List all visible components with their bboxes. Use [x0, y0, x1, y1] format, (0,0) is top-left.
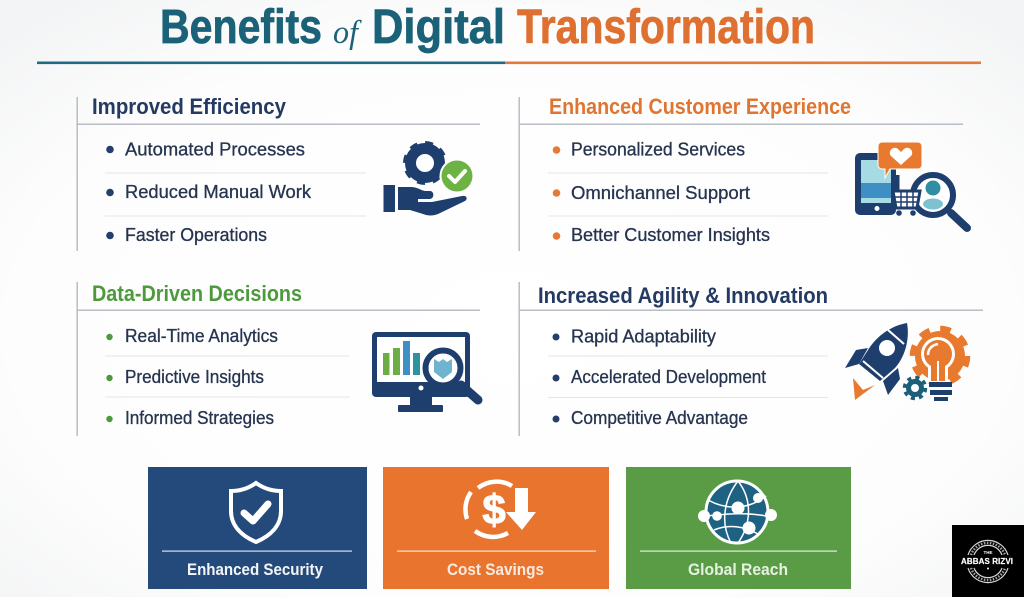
list item: rapid adaptability: Rapid Adaptability: [571, 326, 716, 346]
list item: personalized services: Personalized Services: [571, 140, 745, 160]
title: [160, 1, 815, 54]
label: enhanced security: Enhanced Security: [187, 560, 323, 579]
title: of: [333, 15, 362, 51]
label: cost savings: Cost Savings: [447, 560, 544, 579]
logo: the abbas rizvi: ABBAS RIZVI: [961, 557, 1013, 566]
heading: improved efficiency: Improved Efficiency: [92, 94, 287, 119]
label: global reach: Global Reach: [688, 560, 788, 579]
panel: enhanced customer experience: [518, 94, 963, 251]
icon: dollar with down arrow: [465, 482, 536, 537]
list item: predictive insights: Predictive Insights: [125, 367, 264, 387]
card: enhanced security: [148, 467, 367, 589]
title: Transformation: [517, 1, 815, 54]
icon: rocket and light bulb gear: [845, 323, 967, 401]
list item: faster operations: Faster Operations: [125, 225, 267, 245]
card: cost savings: [383, 467, 609, 589]
list item: real-time analytics: Real-Time Analytics: [125, 326, 278, 346]
list item: automated processes: Automated Processes: [125, 140, 305, 160]
icon: shield with check: [231, 483, 281, 542]
title: Benefits: [160, 1, 322, 54]
list item: better customer insights: Better Customer Insights: [571, 225, 770, 245]
list item: omnichannel support: Omnichannel Support: [571, 183, 750, 203]
icon: gear and hand with check: [384, 144, 474, 216]
card: global reach: [626, 467, 851, 589]
panel: improved efficiency: [76, 94, 480, 251]
icon: monitor chart with magnifier: [372, 332, 478, 412]
icon: tablet, cart and magnifier: [855, 142, 967, 228]
list item: competitive advantage: Competitive Advantage: [571, 408, 748, 428]
panel: data-driven decisions: [76, 281, 480, 436]
title: Digital: [372, 1, 505, 54]
logo: the abbas rizvi: [952, 525, 1024, 597]
title underline: [37, 62, 981, 64]
panel: increased agility and innovation: [518, 282, 983, 436]
list item: accelerated development: Accelerated Development: [571, 367, 766, 387]
heading: data-driven decisions: Data-Driven Decisions: [92, 281, 302, 306]
logo: the abbas rizvi: THE: [984, 550, 992, 555]
list item: informed strategies: Informed Strategies: [125, 408, 274, 428]
icon: network globe: [698, 481, 777, 543]
icon: dollar with down arrow: $: [482, 486, 506, 533]
heading: increased agility and innovation: Increased Agility & Innovation: [538, 283, 828, 308]
heading: enhanced customer experience: Enhanced Customer Experience: [549, 94, 851, 119]
list item: reduced manual work: Reduced Manual Work: [125, 182, 312, 202]
